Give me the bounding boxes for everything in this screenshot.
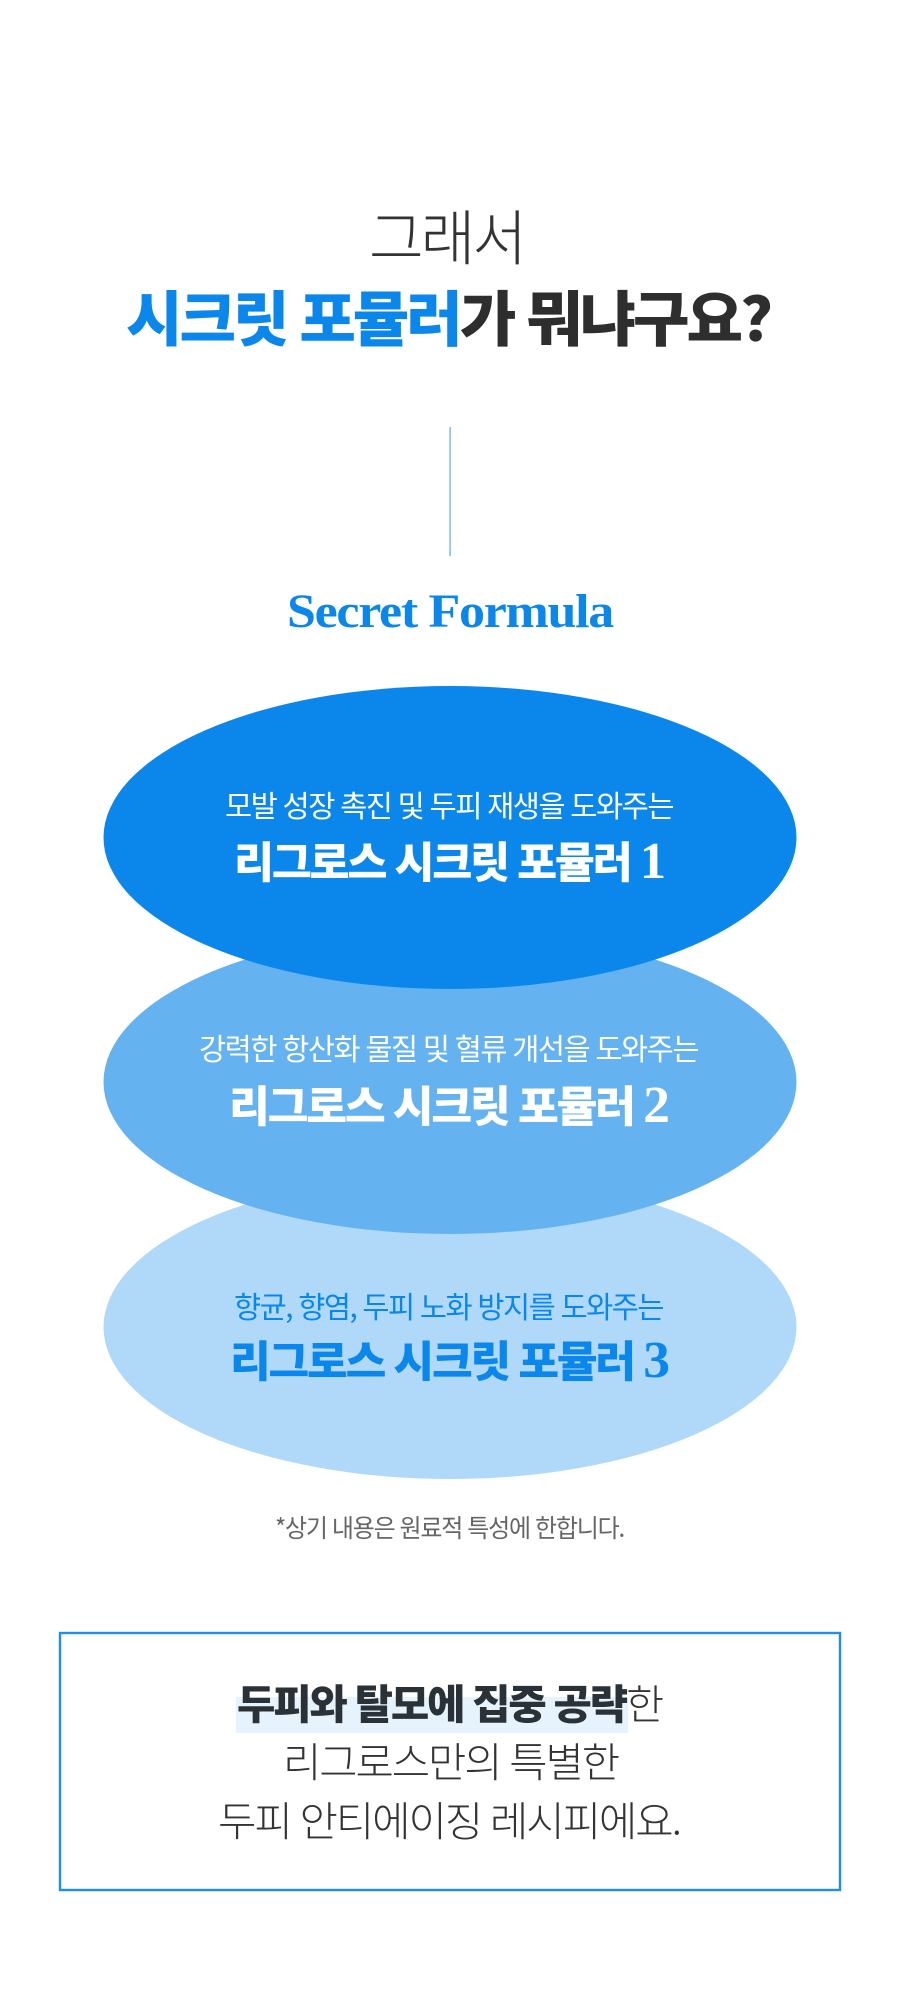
title line 1: 그래서 [369,191,524,278]
formula 1: 리그로스 시크릿 포뮬러 1 [234,829,666,891]
callout line 1: 두피와 탈모에 집중 공략 [237,1671,627,1731]
title [126,191,771,359]
formula 2: 리그로스 시크릿 포뮬러 2 [229,1073,670,1135]
formula 1: 모발 성장 촉진 및 두피 재생을 도와주는 [225,782,674,826]
vertical line [449,427,451,556]
formula 2: 강력한 항산화 물질 및 혈류 개선을 도와주는 [199,1025,699,1069]
formula 3: 향균, 향염, 두피 노화 방지를 도와주는 [234,1283,664,1327]
formula 1 [104,686,796,989]
callout line 2: 리그로스만의 특별한 [283,1729,619,1789]
ellipse stack [104,686,796,1479]
formula 3 [104,1175,796,1479]
title line 2: 시크릿 포뮬러가 뭐냐구요? [126,272,771,359]
footnote: *상기 내용은 원료적 특성에 한합니다. [275,1509,624,1545]
highlight [236,1697,628,1733]
callout box [60,1633,840,1890]
formula 3: 리그로스 시크릿 포뮬러 3 [230,1328,670,1390]
callout line 3: 두피 안티에이징 레시피에요. [218,1788,680,1848]
subtitle: Secret Formula: Secret Formula [287,585,614,638]
callout box: 한 [626,1671,663,1731]
formula 2 [104,930,796,1234]
